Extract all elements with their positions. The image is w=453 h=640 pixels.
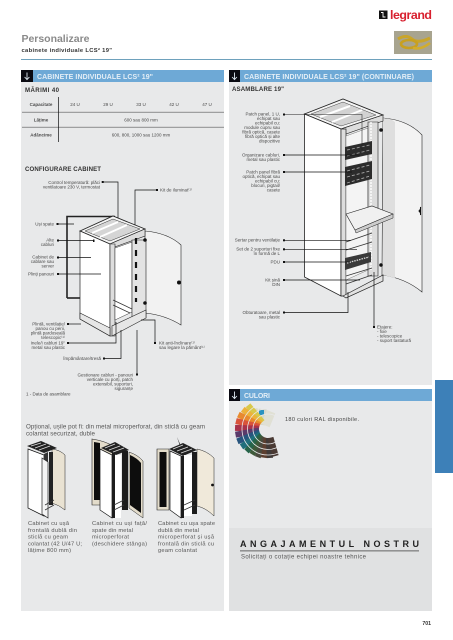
callouts: left diagram: Gestionare cabluri - panouri <box>77 372 133 378</box>
callouts: right diagram: blocuri, pigtail/ <box>251 183 281 188</box>
callouts: left diagram: server <box>41 264 54 268</box>
table: dimensions: 24 U <box>70 102 80 107</box>
heading bar: culori <box>229 389 432 401</box>
caption: variant 3 <box>158 521 215 554</box>
callouts: left diagram: telescopic⁽¹⁾ <box>41 335 65 340</box>
callouts: right diagram: module cupru sau <box>244 125 280 130</box>
callouts: left diagram: Control temperatură: plăci <box>48 180 100 185</box>
callouts: left diagram: siguranțe <box>114 386 133 391</box>
callouts: right diagram: - suport tastatură <box>377 338 412 343</box>
callouts: right diagram: Patch panel fibră <box>246 170 280 174</box>
panel: commitment: Solicitați o cotație echipei noastre tehnice <box>241 554 367 560</box>
heading bar: culori: CULORI <box>244 393 270 400</box>
callouts: right diagram: PDU <box>270 260 280 264</box>
callouts: right diagram: echipabil cu: <box>255 178 280 184</box>
logo: legrand: legrand <box>390 8 432 22</box>
panel: right top grey background <box>229 82 432 385</box>
caption: variant 1: frontală dublă din <box>28 528 77 534</box>
illustration: assembled rack <box>304 99 422 298</box>
callouts: right diagram: fibră optică și alte <box>245 134 280 139</box>
panel: commitment: ANGAJAMENTUL NOSTRU <box>240 539 419 549</box>
side tab <box>435 380 453 473</box>
illustration: cabinet variant 3 <box>157 437 214 518</box>
table: dimensions: Adâncime <box>30 132 52 138</box>
callouts: left diagram: extensibil, suporturi, <box>93 382 133 386</box>
heading: asamblare: ASAMBLARE 19" <box>232 86 284 93</box>
callouts: left diagram: Alte <box>46 238 54 242</box>
callouts: right diagram: Sertar pentru ventilație <box>235 238 280 242</box>
callouts: right diagram: casete <box>267 188 280 192</box>
panel: colours grey background <box>229 401 432 528</box>
caption: variant 3: frontală din sticlă cu <box>158 541 214 547</box>
table: dimensions <box>22 97 224 142</box>
table: dimensions: Lățime <box>34 118 49 124</box>
heading bar: continuare: CABINETE INDIVIDUALE LCS² 19" (CONTINUARE) <box>244 74 414 81</box>
callouts: right diagram: Kit șină <box>265 278 280 282</box>
table: dimensions: 33 U <box>136 102 146 107</box>
callouts: right diagram: fibră optică, casete <box>242 130 280 134</box>
caption: variant 3: geam colantat <box>158 548 197 554</box>
callouts: left diagram: Plintă, ventilație/ <box>32 322 66 326</box>
callouts: right diagram: sau plastic <box>259 314 281 320</box>
callouts: right diagram: dispozitive <box>259 138 280 144</box>
caption: variant 2 <box>92 521 147 547</box>
caption: variant 3: microperforat și ușă <box>158 535 215 541</box>
callouts: right diagram: echipabil cu: <box>255 120 280 126</box>
callouts: left diagram: Kit anti-înclinare⁽¹⁾ <box>159 340 195 346</box>
subtitle: cabinete individuale LCS² 19" <box>22 47 112 54</box>
caption: variant 2: Cabinet cu uși față/ <box>92 521 147 527</box>
text block: optional doors: colantat securizat, duble <box>26 430 96 438</box>
callouts: left diagram: Plinți panouri <box>28 272 54 276</box>
caption: variant 2: microperforat <box>92 535 129 541</box>
callouts: left diagram: Uși spate <box>35 222 54 226</box>
caption: variant 3: dublă din metal <box>158 528 199 534</box>
caption: variant 2: spate din metal <box>92 528 133 534</box>
caption: variant 1: sticlă cu geam <box>28 535 68 541</box>
heading bar: cabinete individuale: CABINETE INDIVIDUALE LCS² 19" <box>37 74 153 81</box>
caption: variant 3: Cabinet cu ușa spate <box>158 521 215 527</box>
callouts: left diagram: Kit de iluminat⁽¹⁾ <box>160 188 192 192</box>
callouts: right diagram: echipat sau <box>257 116 280 121</box>
table: dimensions: 42 U <box>169 102 179 107</box>
text block: optional doors <box>26 424 205 438</box>
panel: commitment <box>229 528 432 611</box>
caption: variant 2: (deschidere stânga) <box>92 541 147 547</box>
table: dimensions: 600, 800, 1000 sau 1200 mm <box>112 132 171 138</box>
callouts: left diagram: plintă pardoseală <box>31 330 65 336</box>
callouts: left diagram: Inele/i cabluri 19" <box>31 340 65 346</box>
callouts: left diagram: sau legare la pământ⁽¹⁾ <box>159 345 205 350</box>
callouts: left diagram <box>28 180 205 391</box>
table: dimensions: 47 U <box>202 102 212 107</box>
photo: measuring tape <box>394 31 432 54</box>
callouts: left diagram: Cabinet de <box>32 254 54 260</box>
text block: optional doors: Opțional, ușile pot fi: din metal microperforat, din sticlă cu geam <box>26 424 205 430</box>
icon: RAL colour fan <box>235 403 294 458</box>
callouts: left diagram: panou cu perii, <box>35 326 65 331</box>
illustration: open cabinet <box>67 216 181 336</box>
caption: variant 1: lățime 800 mm) <box>28 548 71 554</box>
callouts: right diagram: Obturatoare, metal <box>242 310 280 315</box>
panel: left grey background <box>21 82 224 611</box>
caption: variant 1 <box>28 521 82 554</box>
callouts: right diagram: în formă de L <box>252 251 280 256</box>
callouts: left diagram: Împământare/tresă <box>62 355 101 361</box>
illustration: cabinet variant 1 <box>27 441 65 518</box>
page number: 701 <box>422 621 431 627</box>
callouts: left diagram: ventilatoare 230 V, termostat <box>43 184 101 190</box>
callouts: right diagram: Organizare cabluri, <box>242 152 280 158</box>
callouts: right diagram: Set de 2 suporturi fixe <box>236 246 280 252</box>
callouts: left diagram: cabluri <box>41 242 54 247</box>
text: RAL colours: 180 culori RAL disponibile. <box>285 417 359 423</box>
callouts: right diagram: Etajere: <box>377 324 393 330</box>
callouts: right diagram: - telescopice <box>377 334 403 338</box>
callouts: left diagram: metal sau plastic <box>31 345 66 350</box>
heading: marimi: MĂRIMI 40 <box>25 87 60 94</box>
callouts: right diagram <box>235 112 412 343</box>
title: Personalizare <box>22 33 90 45</box>
table: dimensions: Capacitate <box>30 102 53 107</box>
caption: variant 1: colantat (42 U/47 U; <box>28 541 82 547</box>
table: dimensions: 600 sau 800 mm <box>124 118 158 122</box>
callouts: right diagram: DIN <box>272 282 280 287</box>
illustration: cabinet variant 2 <box>92 439 143 518</box>
callouts: right diagram: optică, echipat sau <box>242 174 280 179</box>
callouts: right diagram: - fixe <box>377 329 387 334</box>
table: dimensions: 29 U <box>103 102 113 107</box>
heading bar: continuare <box>229 70 432 82</box>
heading bar: cabinete individuale <box>21 70 224 82</box>
callouts: left diagram: cablare sau <box>31 259 54 264</box>
callouts: right diagram: metal sau plastic <box>246 157 281 162</box>
callouts: right diagram: Patch panel, 1 U, <box>245 112 280 116</box>
callouts: left diagram: verticale cu porți, patch <box>87 377 133 382</box>
caption: variant 1: Cabinet cu ușă <box>28 521 70 527</box>
heading: configurare cabinet: CONFIGURARE CABINET <box>25 166 101 173</box>
footnote: 1 - Data de asamblare <box>26 392 71 396</box>
